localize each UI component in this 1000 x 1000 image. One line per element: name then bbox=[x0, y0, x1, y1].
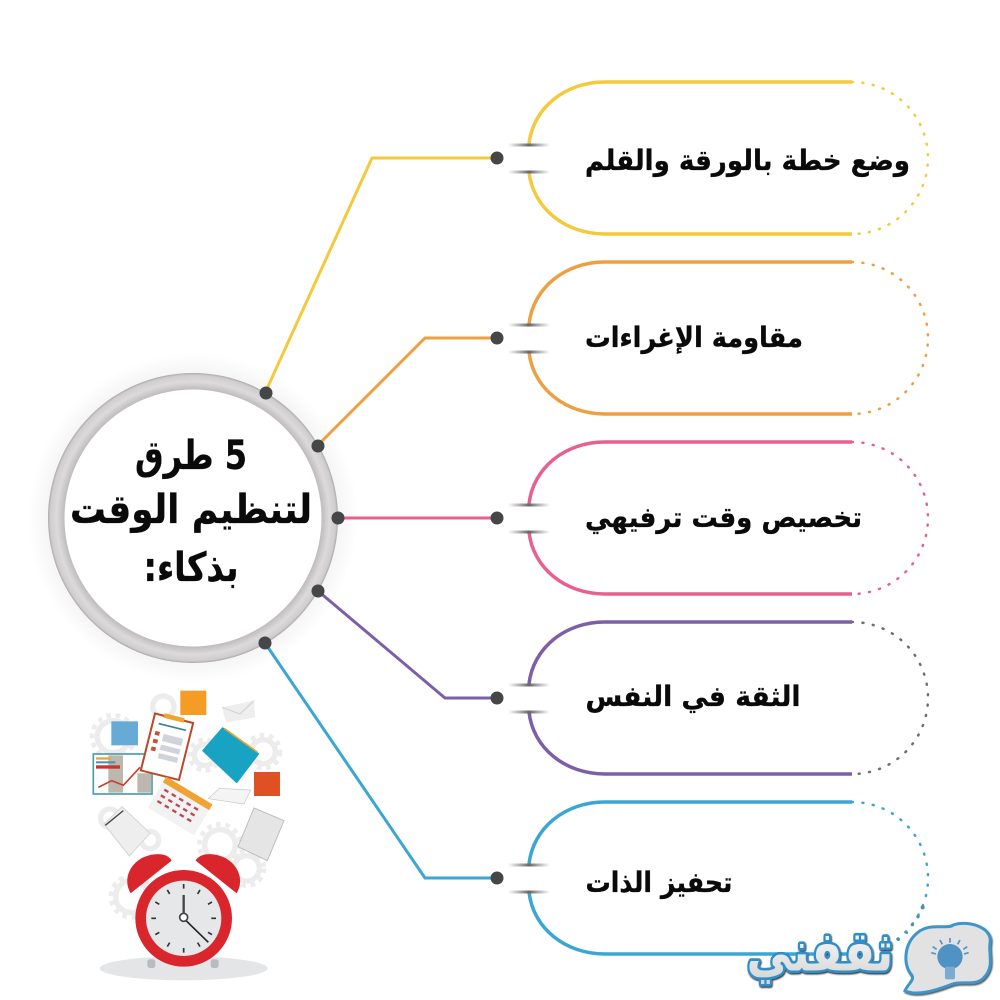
teal folder bbox=[203, 728, 258, 782]
central title: بذكاء: bbox=[144, 545, 238, 591]
red note bbox=[254, 772, 280, 796]
panel: step 4 bbox=[490, 622, 928, 774]
connector dots on circle bbox=[258, 386, 344, 650]
illustration: alarm clock with office items bbox=[92, 691, 284, 980]
connector: pink bbox=[338, 516, 497, 520]
connector: orange bbox=[318, 338, 497, 445]
label: مقاومة الإغراءات bbox=[585, 321, 803, 354]
clock bells bbox=[127, 854, 172, 893]
connector: blue bbox=[265, 643, 497, 878]
clock face bbox=[135, 870, 232, 967]
envelope bbox=[222, 701, 255, 723]
connector: yellow bbox=[265, 158, 497, 393]
central circle bbox=[28, 353, 358, 683]
panel: step 2 bbox=[490, 262, 928, 414]
panel: step 5 bbox=[490, 802, 928, 954]
clipboard bbox=[141, 711, 194, 780]
central title: 5 طرق bbox=[135, 433, 247, 479]
shadow bbox=[100, 956, 268, 980]
panel: step 3 bbox=[490, 442, 928, 594]
chart board bbox=[93, 754, 152, 794]
label: وضع خطة بالورقة والقلم bbox=[585, 144, 910, 177]
dotted trail bbox=[897, 905, 925, 941]
central title: لتنظيم الوقت bbox=[70, 487, 312, 533]
calendar bbox=[148, 777, 213, 835]
panel: step 1 bbox=[490, 82, 928, 234]
paper card bbox=[208, 788, 251, 804]
logo: site brand bbox=[747, 905, 990, 993]
blue note bbox=[111, 721, 138, 745]
gears bbox=[92, 696, 280, 917]
logo wordmark: ثقفني bbox=[747, 920, 893, 985]
central title bbox=[70, 433, 312, 591]
label: الثقة في النفس bbox=[586, 680, 800, 713]
clock feet bbox=[147, 959, 155, 968]
orange note bbox=[180, 691, 206, 715]
connector: purple bbox=[318, 591, 497, 698]
label: تخصيص وقت ترفيهي bbox=[585, 501, 862, 534]
notebook bbox=[104, 807, 150, 856]
label: تحفيز الذات bbox=[586, 866, 732, 899]
speech bubble bbox=[905, 923, 990, 993]
bulb icon bbox=[931, 938, 969, 979]
document bbox=[238, 808, 284, 861]
